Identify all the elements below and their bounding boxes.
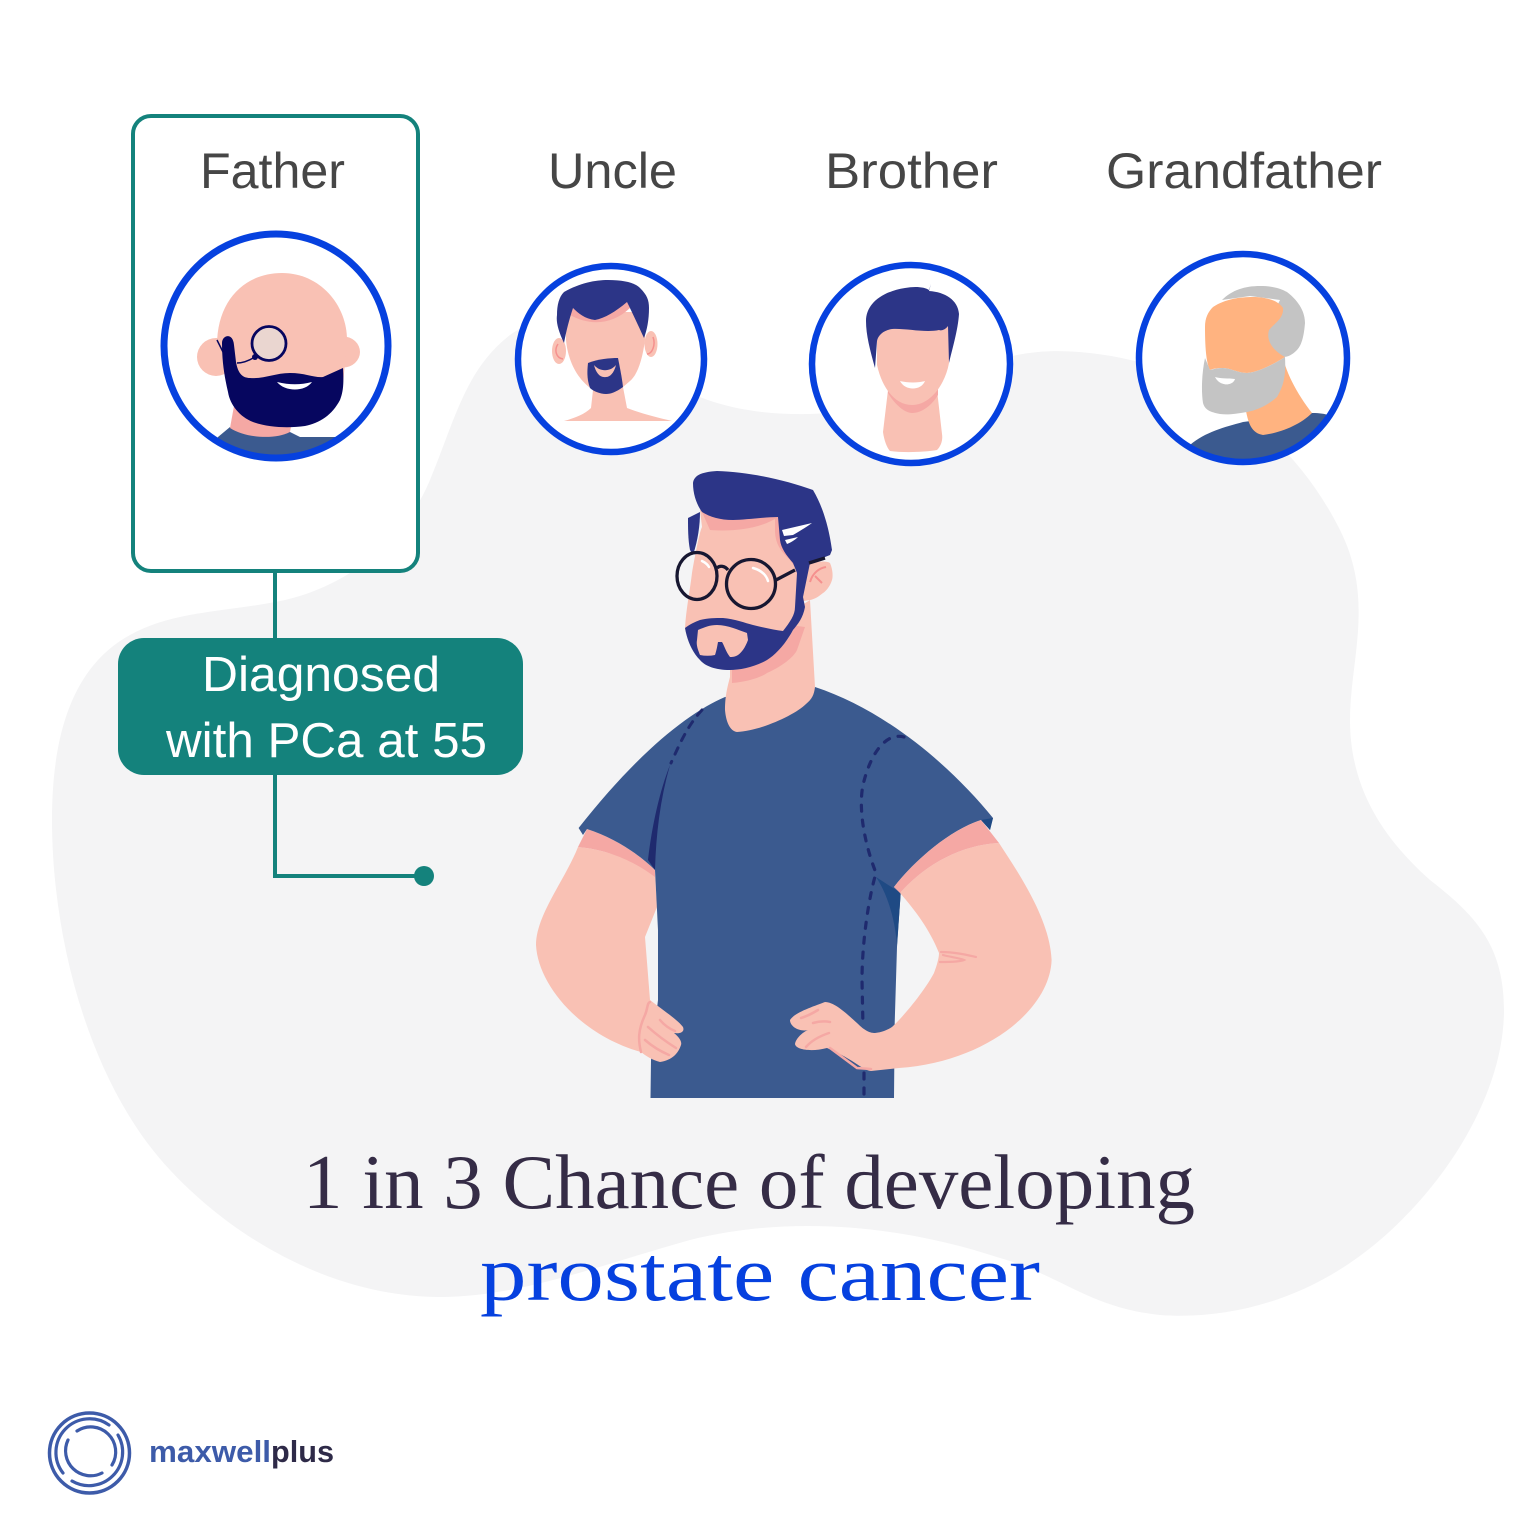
neck shadow <box>732 625 805 683</box>
label: diagnosis callout: Diagnosed <box>202 648 440 702</box>
sideburn <box>688 512 700 555</box>
label: diagnosis callout <box>118 638 523 775</box>
label: Brother: Brother <box>825 143 998 199</box>
headline line 2: prostate cancer <box>480 1230 1040 1317</box>
icon: father portrait <box>163 233 389 470</box>
panel: father card <box>133 116 418 571</box>
logo: maxwellplus: plus <box>271 1434 334 1469</box>
neck <box>725 600 815 732</box>
left hand lines <box>639 1002 676 1055</box>
right hand lines <box>801 1010 871 1069</box>
connector line <box>275 571 424 876</box>
hair <box>685 471 832 670</box>
left hand <box>639 1000 683 1062</box>
hair highlight <box>782 523 812 544</box>
label: diagnosis callout: with PCa at 55 <box>165 714 487 768</box>
label: Grandfather: Grandfather <box>1106 143 1382 199</box>
right arm <box>790 843 1052 1071</box>
logo: maxwellplus: maxwell <box>149 1434 271 1469</box>
label: Father: Father <box>200 143 345 199</box>
seam right <box>861 736 904 1095</box>
icon: uncle portrait <box>518 266 704 452</box>
shirt shadow sleeve corner <box>981 818 993 830</box>
sleeve shadow left <box>578 829 655 877</box>
ear <box>798 562 833 602</box>
icon: brother portrait <box>811 264 1011 464</box>
glasses glints <box>702 561 768 581</box>
shirt shadow right <box>876 877 901 945</box>
sleeve shadow right <box>894 820 999 893</box>
goatee gap <box>697 625 748 657</box>
ear line <box>810 567 826 583</box>
label: Uncle: Uncle <box>548 143 677 199</box>
headline line 1: 1 in 3 Chance of developing <box>303 1139 1195 1225</box>
icon: grandfather portrait <box>1139 254 1347 480</box>
shirt <box>579 687 993 1098</box>
forehead shadow <box>702 510 778 530</box>
face <box>685 510 800 670</box>
temple shadow <box>775 512 797 570</box>
shirt fold left <box>648 765 670 870</box>
glasses <box>677 552 825 608</box>
seam left <box>671 710 702 763</box>
elbow crease <box>940 952 976 962</box>
logo: maxwellplus <box>50 1413 334 1493</box>
illustration: central man <box>536 471 1052 1098</box>
background blob <box>52 320 1504 1316</box>
left arm <box>536 847 657 1052</box>
connector end dot <box>414 866 434 886</box>
